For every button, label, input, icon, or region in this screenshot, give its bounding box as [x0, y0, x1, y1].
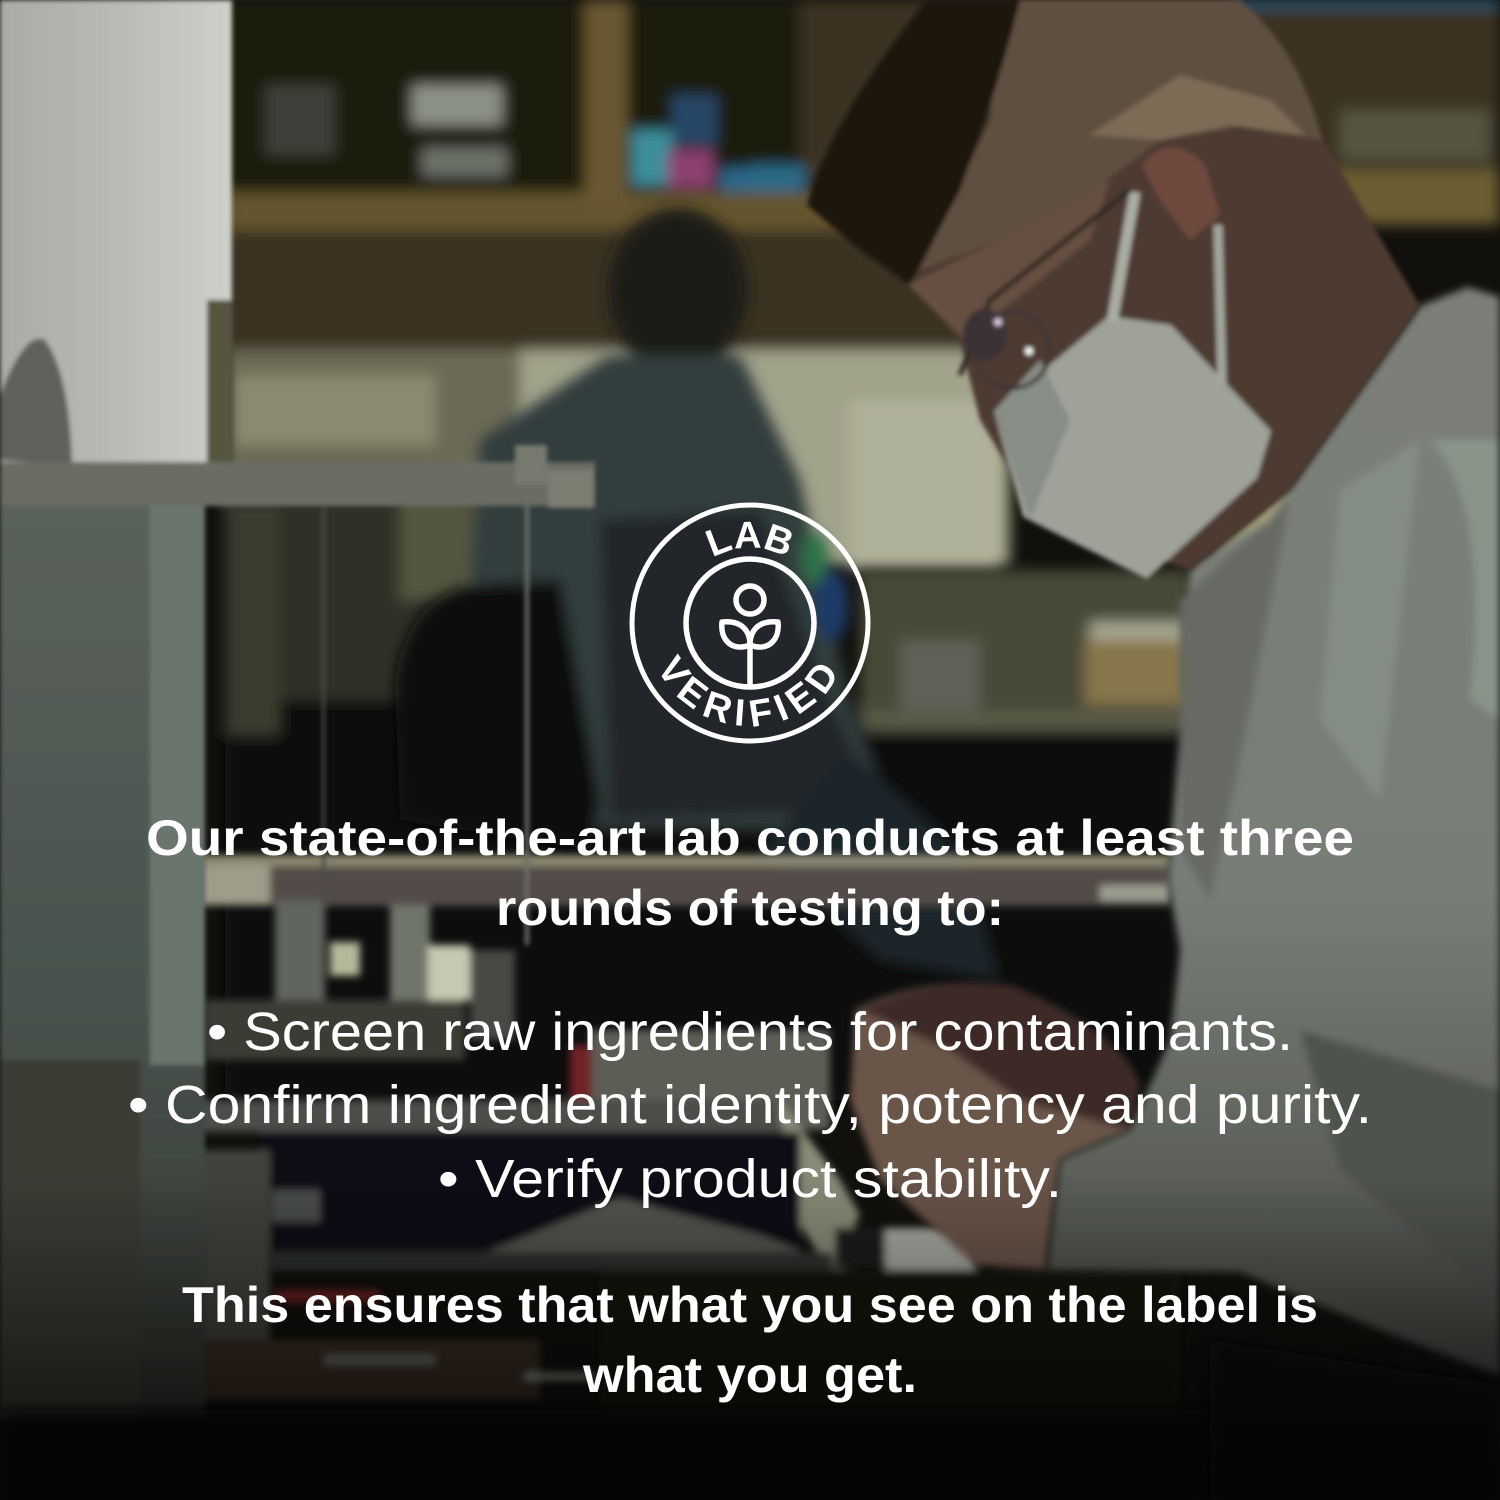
left white column	[0, 0, 595, 1420]
scientist hands	[850, 983, 1140, 1270]
intro heading: rounds of testing to:	[496, 880, 1004, 936]
mid bench zone	[225, 480, 1205, 1100]
bullet list: • Screen raw ingredients for contaminants.	[207, 1002, 1293, 1062]
closing statement: what you get.	[582, 1347, 917, 1403]
closing statement	[182, 1277, 1318, 1403]
lower right sleeve shadow	[1210, 1340, 1500, 1500]
background person	[395, 208, 1000, 980]
mask	[994, 316, 1271, 579]
scientist coat	[1047, 287, 1500, 1375]
dark quiff	[807, 0, 1020, 285]
badge curved text: verified: VERIFIED	[662, 654, 834, 727]
glasses	[960, 190, 1130, 375]
neck and face	[905, 120, 1420, 570]
bullet list	[128, 1002, 1372, 1209]
bullet list: • Verify product stability.	[438, 1149, 1062, 1209]
cropped hair	[920, 0, 1322, 270]
ear	[1142, 148, 1220, 240]
intro heading	[146, 810, 1354, 936]
back wall and shelves	[225, 0, 1500, 570]
icon: sprout	[722, 586, 778, 685]
mask straps	[1112, 192, 1135, 322]
lab verified badge	[630, 502, 870, 744]
bottom floor shadow	[0, 1410, 1500, 1500]
badge inner ring	[686, 559, 814, 687]
scientist head	[807, 0, 1420, 579]
bullet list: • Confirm ingredient identity, potency and purity.	[128, 1075, 1372, 1135]
badge outer ring	[632, 505, 868, 741]
bench instruments	[140, 855, 1180, 1410]
intro heading: Our state-of-the-art lab conducts at least three	[146, 810, 1354, 866]
closing statement: This ensures that what you see on the label is	[182, 1277, 1318, 1333]
badge curved text: lab: LAB	[705, 522, 792, 556]
